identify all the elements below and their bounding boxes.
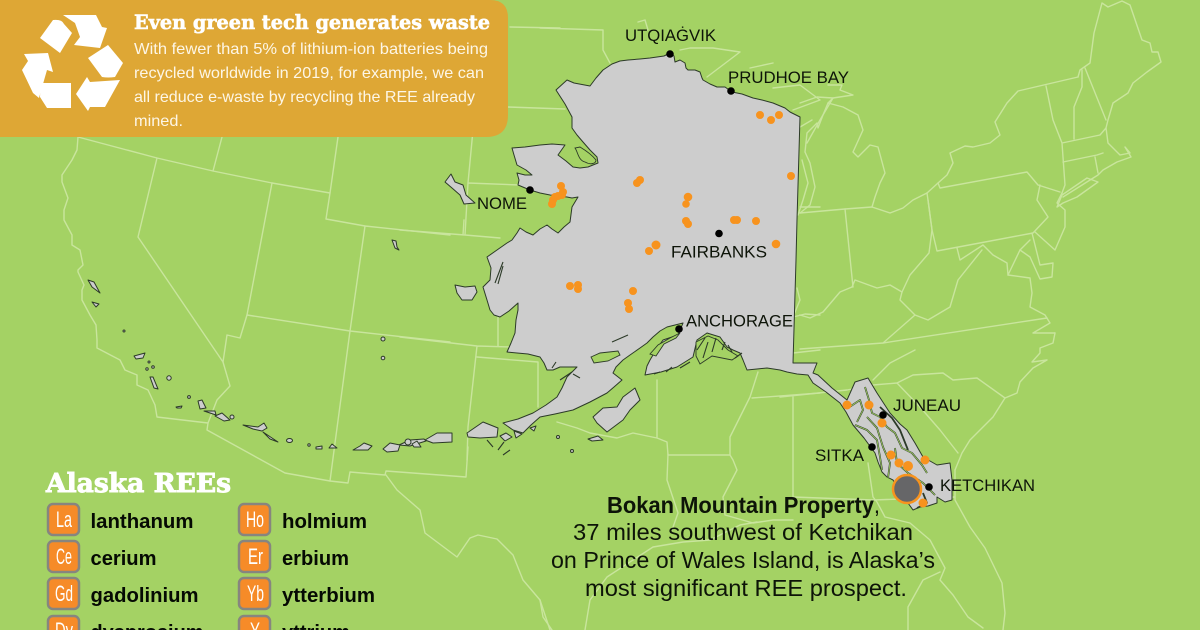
city labels: UTQIAĠVIK bbox=[625, 25, 717, 45]
city labels: ANCHORAGE bbox=[686, 312, 793, 330]
callout: Bokan Mountain Property bbox=[551, 492, 935, 601]
element names: cerium bbox=[90, 548, 156, 570]
city dots bbox=[526, 50, 933, 491]
city labels: SITKA bbox=[815, 446, 865, 465]
callout: Bokan Mountain Property: 37 miles southwest of Ketchikan bbox=[573, 519, 913, 545]
element names bbox=[90, 511, 375, 630]
element names: lanthanum bbox=[90, 511, 194, 533]
icon: recycling symbol bbox=[22, 15, 123, 111]
legend title: Alaska REEs bbox=[45, 469, 231, 499]
element names: holmium bbox=[282, 511, 367, 533]
panel body text: all reduce e-waste by recycling the REE already bbox=[134, 89, 475, 106]
panel heading: Even green tech generates waste bbox=[134, 10, 490, 34]
element names: erbium bbox=[282, 548, 349, 570]
element names: ytterbium bbox=[282, 585, 375, 607]
panhandle channels bbox=[848, 387, 935, 508]
element symbols: Gd bbox=[55, 581, 73, 606]
callout: Bokan Mountain Property: most significant REE prospect. bbox=[585, 575, 907, 601]
element symbols: Er bbox=[248, 544, 263, 569]
legend badges bbox=[48, 504, 270, 630]
panel body text: With fewer than 5% of lithium-ion batteries being bbox=[134, 41, 488, 58]
city labels bbox=[477, 25, 1035, 495]
element symbols bbox=[55, 507, 264, 630]
city labels: JUNEAU bbox=[893, 396, 961, 415]
city labels: NOME bbox=[477, 194, 527, 213]
callout: Bokan Mountain Property: Bokan Mountain Property, bbox=[607, 492, 880, 518]
element symbols: Ho bbox=[246, 507, 264, 532]
element symbols: La bbox=[56, 507, 72, 532]
element symbols: Ce bbox=[56, 544, 72, 569]
element symbols: Yb bbox=[247, 581, 264, 606]
city labels: PRUDHOE BAY bbox=[728, 68, 849, 87]
Alaska islands bbox=[88, 174, 640, 455]
city labels: FAIRBANKS bbox=[671, 242, 767, 262]
panel: even green tech generates waste bbox=[0, 0, 508, 137]
city labels: KETCHIKAN bbox=[940, 476, 1035, 495]
legend: Alaska REEs bbox=[45, 469, 375, 630]
panel body text: mined. bbox=[134, 113, 183, 130]
callout: Bokan Mountain Property: on Prince of Wales Island, is Alaska’s bbox=[551, 547, 935, 573]
panel body text: recycled worldwide in 2019, for example, we can bbox=[134, 65, 484, 82]
panel body text bbox=[134, 41, 488, 130]
Bokan Mountain marker bbox=[893, 475, 921, 503]
element names: gadolinium bbox=[90, 585, 198, 607]
orange REE occurrence dots bbox=[548, 111, 930, 508]
Alaska mainland bbox=[483, 53, 952, 510]
